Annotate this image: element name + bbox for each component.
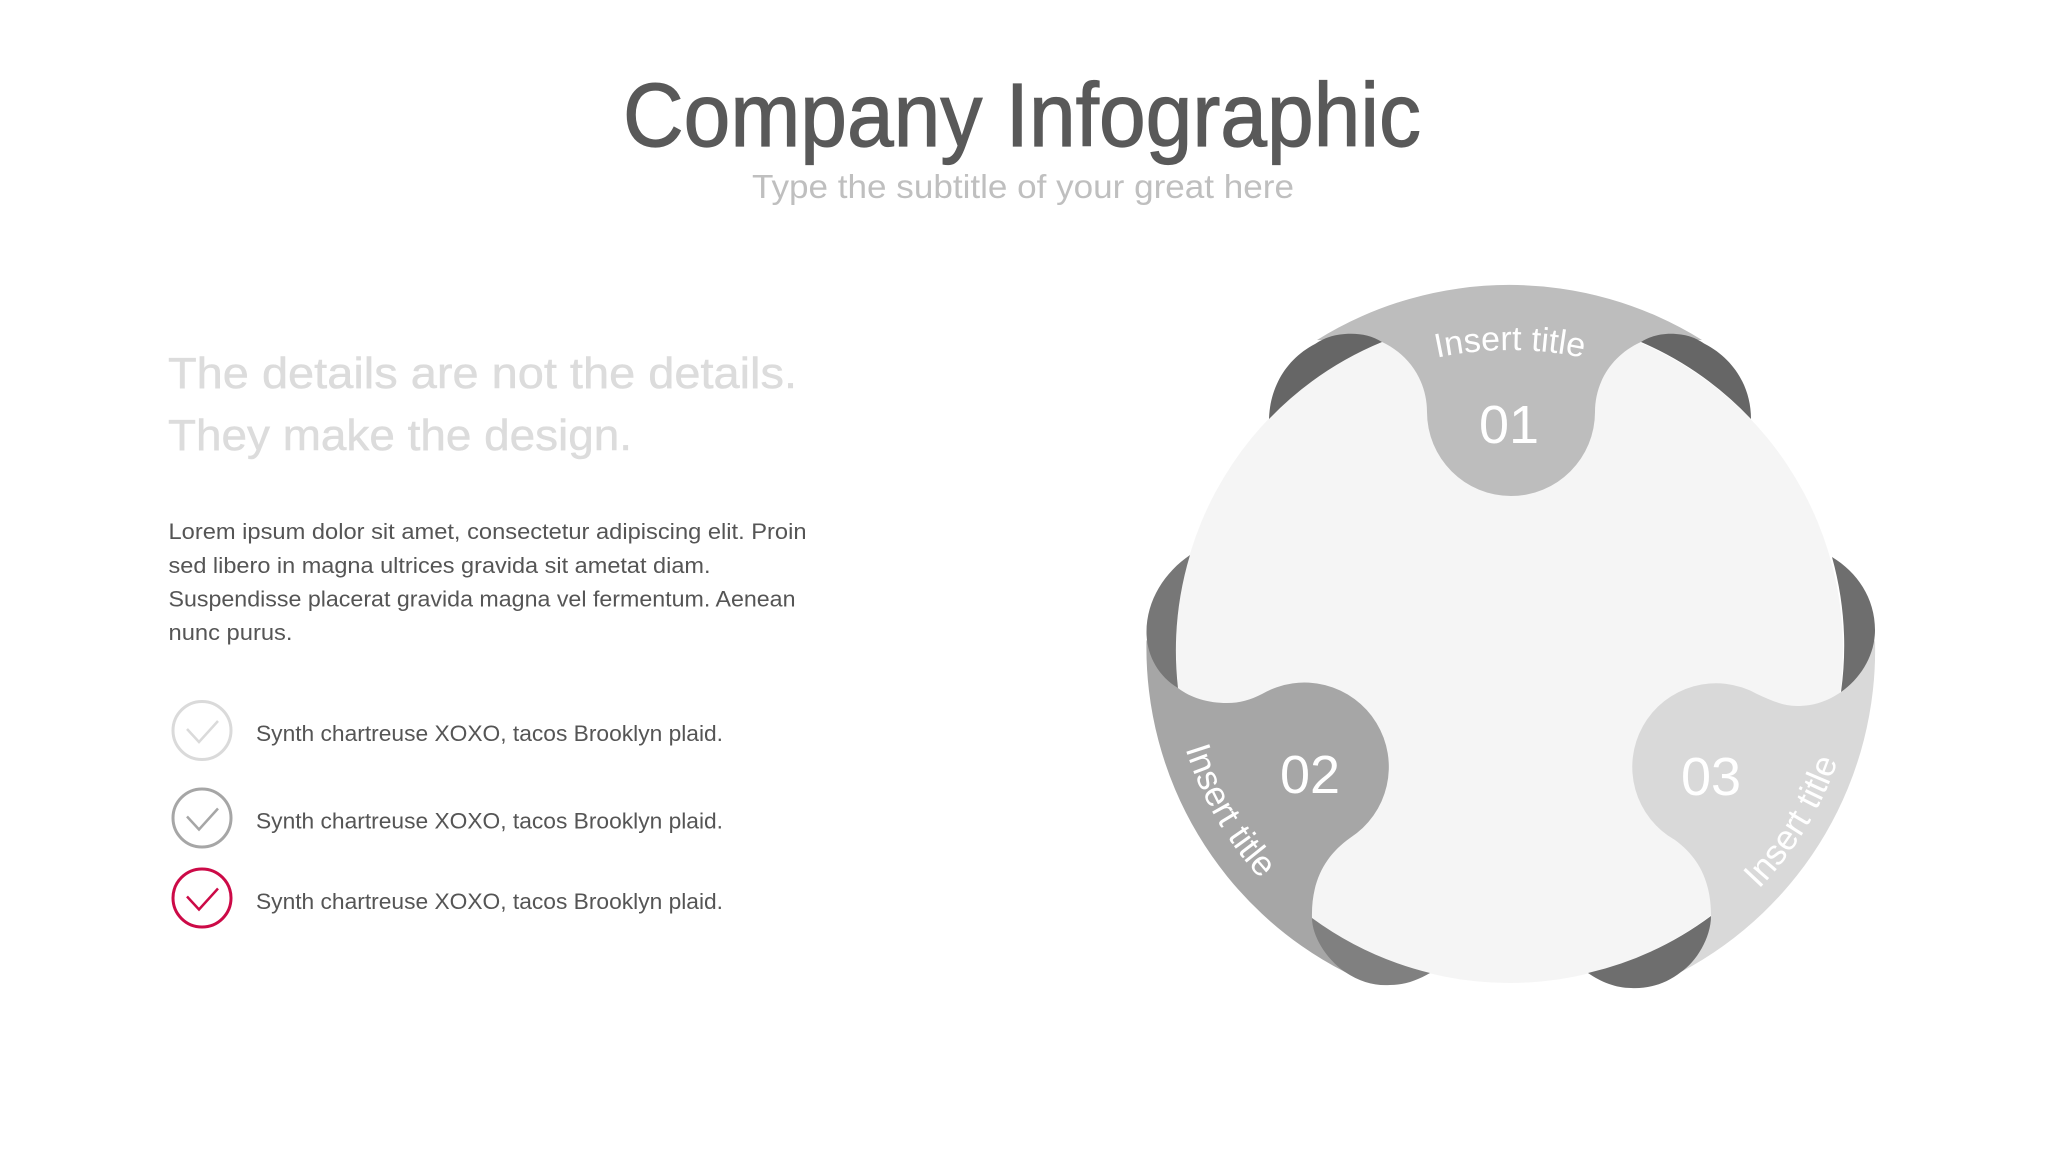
icon: light grey check (173, 702, 231, 760)
title: Company Infographic (623, 66, 1421, 166)
segment 02: Insert title (1186, 744, 1271, 876)
heading: quote: They make the design. (168, 411, 632, 460)
segment 03 (1588, 557, 1876, 988)
heading: quote: The details are not the details. (168, 349, 797, 398)
checklist item 2 (173, 789, 723, 847)
centre circle (1176, 316, 1843, 983)
checklist item 1 (173, 702, 723, 760)
checklist item 3 (173, 869, 723, 927)
text block: body paragraph: Suspendisse placerat gravida magna vel fermentum. Aenean (168, 586, 796, 612)
chart: three-part circular diagram (1146, 284, 1876, 988)
segment 01 (1269, 284, 1751, 496)
segment 01: Insert title (1435, 327, 1584, 357)
segment 03: Insert title (1744, 758, 1836, 887)
text block: body paragraph: Lorem ipsum dolor sit amet, consectetur adipiscing elit. Proin (168, 519, 806, 544)
heading: quote (168, 349, 797, 460)
segment 01: 01 (1479, 395, 1539, 455)
text block: body paragraph: nunc purus. (168, 620, 292, 645)
checklist item 3: Synth chartreuse XOXO, tacos Brooklyn plaid. (256, 889, 723, 914)
text block: body paragraph: sed libero in magna ultrices gravida sit ametat diam. (168, 553, 710, 578)
segment 02: 02 (1280, 745, 1340, 805)
text block: body paragraph (168, 519, 806, 645)
checklist item 1: Synth chartreuse XOXO, tacos Brooklyn plaid. (256, 721, 723, 746)
icon: red check (173, 869, 231, 927)
segment 03: 03 (1681, 747, 1741, 807)
icon: grey check (173, 789, 231, 847)
segment 02 (1146, 555, 1430, 986)
checklist item 2: Synth chartreuse XOXO, tacos Brooklyn plaid. (256, 808, 723, 834)
subtitle: Type the subtitle of your great here (752, 168, 1294, 205)
